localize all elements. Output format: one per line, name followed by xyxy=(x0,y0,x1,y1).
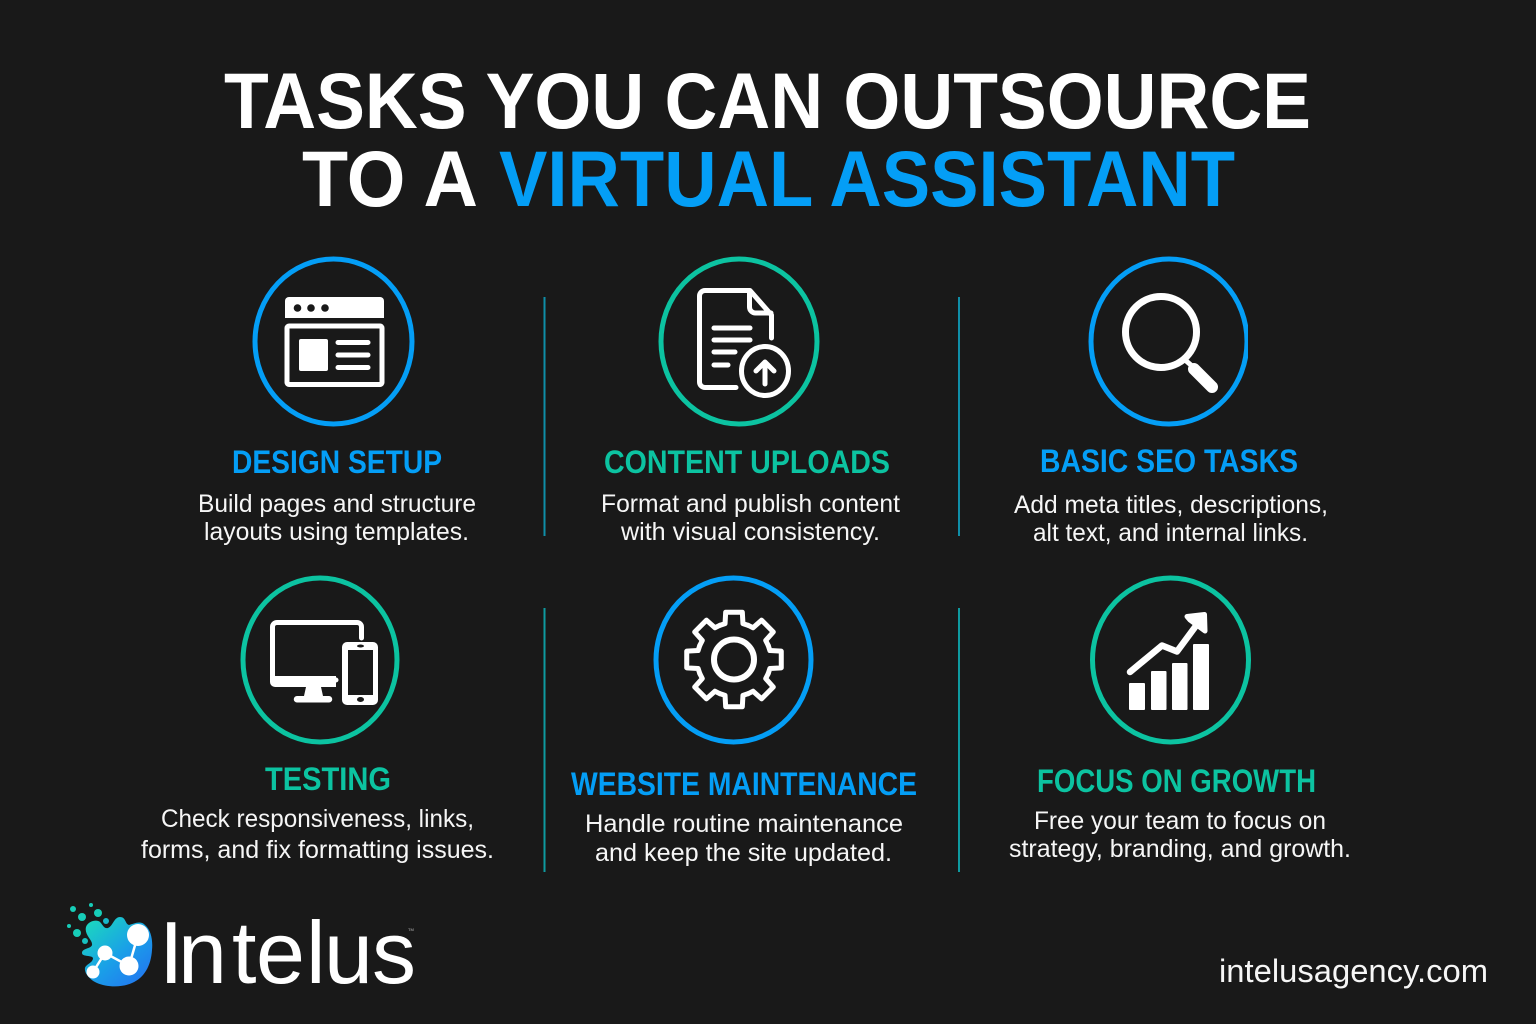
text: website maintenance description: Handle routine maintenance xyxy=(585,810,903,838)
heading: focus on growth: FOCUS ON GROWTH xyxy=(1037,763,1316,799)
heading: design setup: DESIGN SETUP xyxy=(232,444,442,480)
text: testing description: Check responsiveness, links, xyxy=(161,805,474,833)
logo: Intelus xyxy=(67,903,416,1002)
text: content uploads description: with visual consistency. xyxy=(620,518,880,546)
panel: testing xyxy=(141,578,494,864)
text: testing description: forms, and fix formatting issues. xyxy=(141,836,494,864)
text: content uploads description xyxy=(601,490,900,546)
icon: browser window xyxy=(255,259,412,424)
heading: content uploads: CONTENT UPLOADS xyxy=(604,444,890,480)
icon: magnifying glass xyxy=(1091,250,1260,440)
logo: Intelus: TM xyxy=(408,927,414,932)
text: design setup description: layouts using templates. xyxy=(204,518,469,546)
wordmark: Intelus xyxy=(159,903,416,1002)
icon: document upload xyxy=(661,259,817,424)
panel: focus on growth xyxy=(1009,578,1351,863)
website url: intelusagency.com xyxy=(1219,953,1488,989)
title: VIRTUAL ASSISTANT xyxy=(499,134,1235,223)
text: basic seo description xyxy=(1014,491,1328,547)
icon: monitor and phone xyxy=(243,578,397,742)
text: content uploads description: Format and publish content xyxy=(601,490,900,518)
text: focus on growth description xyxy=(1009,807,1351,863)
panel: design setup xyxy=(198,259,476,546)
heading: testing: TESTING xyxy=(265,761,391,797)
text: focus on growth description: strategy, branding, and growth. xyxy=(1009,835,1351,863)
text: website maintenance description xyxy=(585,810,903,867)
panel: content uploads xyxy=(601,259,900,546)
panel: website maintenance xyxy=(571,578,917,867)
title: TO A xyxy=(302,134,478,223)
icon: gear xyxy=(656,578,811,742)
text: website maintenance description: and keep the site updated. xyxy=(595,839,892,867)
text: focus on growth description: Free your team to focus on xyxy=(1034,807,1326,835)
text: design setup description: Build pages and structure xyxy=(198,490,476,518)
heading: website maintenance: WEBSITE MAINTENANCE xyxy=(571,766,917,802)
text: design setup description xyxy=(198,490,476,546)
text: basic seo description: Add meta titles, descriptions, xyxy=(1014,491,1328,519)
icon: growth chart xyxy=(1092,578,1248,742)
text: testing description xyxy=(141,805,494,864)
icon: Intelus molecule mark xyxy=(67,903,152,986)
panel: basic seo tasks xyxy=(1014,250,1328,547)
heading: basic seo tasks: BASIC SEO TASKS xyxy=(1040,443,1298,479)
title xyxy=(224,56,1311,223)
title: TASKS YOU CAN OUTSOURCE xyxy=(224,56,1311,145)
text: basic seo description: alt text, and internal links. xyxy=(1033,519,1308,547)
